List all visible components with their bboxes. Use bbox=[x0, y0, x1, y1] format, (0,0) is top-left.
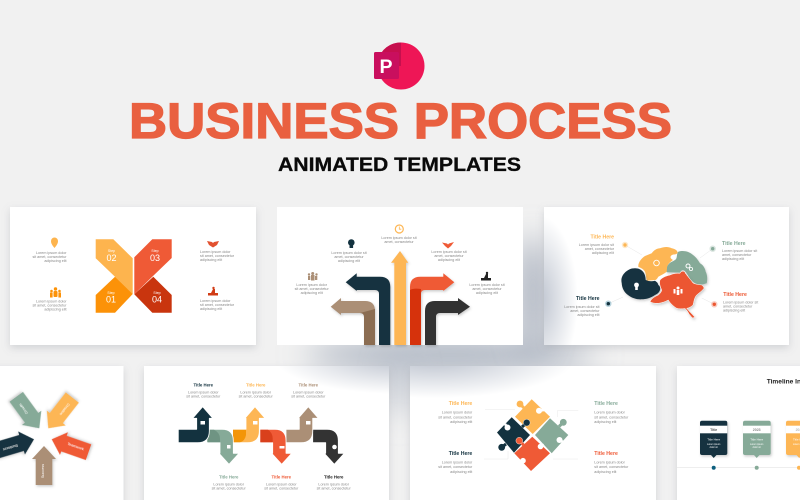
label: navy: Title Here bbox=[194, 382, 214, 388]
panel: radial arrows bbox=[0, 366, 124, 500]
card: navy: Title Here bbox=[707, 438, 720, 442]
ribbon: navy up bbox=[178, 407, 213, 443]
brain: navy lobe bbox=[621, 268, 660, 299]
card: green: Title Here bbox=[750, 438, 763, 442]
text block: brown: adipiscing elit bbox=[301, 291, 323, 295]
icon: people bbox=[50, 287, 61, 298]
label: navy bbox=[438, 451, 473, 474]
X diagram: Step bbox=[153, 291, 161, 295]
label: red bbox=[711, 292, 758, 312]
arrow: brown Success: Success bbox=[41, 464, 45, 478]
label: green: sit amet, consectetur bbox=[212, 486, 246, 490]
panel: arrows bbox=[277, 207, 523, 345]
label: red: sit amet, consectetur bbox=[264, 486, 299, 490]
ribbon: black down bbox=[313, 429, 344, 464]
card: yellow bbox=[786, 421, 800, 470]
text block: top left: Lorem ipsum dolor bbox=[36, 251, 67, 255]
icon: people bbox=[308, 272, 318, 280]
ribbon: green down bbox=[207, 429, 239, 464]
label: yellow bbox=[438, 401, 473, 424]
X diagram bbox=[96, 239, 172, 313]
arrow: black bbox=[425, 298, 470, 345]
text block: red: Lorem ipsum dolor sit bbox=[431, 250, 467, 254]
brain: red lobe bbox=[650, 271, 704, 318]
label: navy: adipiscing elit bbox=[450, 470, 472, 474]
arrow: brown Success bbox=[32, 446, 56, 485]
X diagram: 02 bbox=[106, 253, 117, 263]
panel: timeline bbox=[677, 366, 800, 500]
label: green bbox=[594, 401, 629, 424]
title: BUSINESS PROCESS bbox=[129, 93, 672, 149]
text block: bottom left: sit amet, consectetur bbox=[32, 304, 67, 308]
label: red: sit amet, consectetur bbox=[594, 465, 629, 469]
label: navy: Lorem ipsum dolor bbox=[188, 390, 219, 394]
text block: bottom right bbox=[200, 299, 235, 311]
label: yellow: Lorem ipsum dolor sit bbox=[579, 243, 614, 247]
brain: green lobe bbox=[666, 251, 707, 285]
label: navy bbox=[186, 382, 221, 398]
text block: red: amet, consectetur bbox=[434, 254, 464, 258]
card: green bbox=[743, 421, 771, 470]
panel: X steps bbox=[10, 207, 256, 345]
label: yellow: adipiscing elit bbox=[592, 251, 614, 255]
label: green: Lorem ipsum dolor bbox=[594, 410, 626, 414]
icon: pin bbox=[51, 238, 58, 248]
card: green: dolor sit bbox=[753, 446, 761, 449]
arrow: red bbox=[410, 273, 454, 345]
label: red: amet, consectetur bbox=[723, 304, 753, 308]
arrow: navy bbox=[346, 273, 390, 345]
ribbon icons bbox=[200, 421, 337, 449]
text block: navy: amet, consectetur bbox=[334, 255, 364, 259]
label: green: Lorem ipsum dolor bbox=[213, 483, 245, 487]
icon: hand bbox=[208, 287, 218, 296]
text block: brown: sit amet, consectetur bbox=[295, 287, 329, 291]
text block: red bbox=[431, 250, 467, 262]
text block: center: Lorem ipsum dolor sit bbox=[381, 236, 417, 240]
arrow: brown bbox=[331, 298, 375, 345]
text block: bottom right: adipiscing elit bbox=[200, 307, 222, 311]
icon: handshake bbox=[442, 242, 454, 248]
icon: handshake bbox=[207, 241, 219, 248]
label: black bbox=[317, 474, 351, 490]
brain icons bbox=[634, 260, 693, 295]
text block: top right bbox=[200, 250, 235, 262]
arrow: yellow bbox=[391, 251, 408, 345]
text block: top left: sit amet, consectetur bbox=[32, 255, 67, 259]
label: brown: Title Here bbox=[299, 382, 319, 388]
logo: PowerPoint: P bbox=[379, 56, 393, 78]
puzzle pieces bbox=[497, 399, 568, 471]
label: yellow: sit amet, consectetur bbox=[239, 394, 273, 398]
panel: brain bbox=[544, 207, 789, 345]
text block: navy: Lorem ipsum dolor sit bbox=[331, 251, 367, 255]
arrow: navy Business bbox=[0, 428, 37, 462]
label: yellow: Title Here bbox=[590, 234, 614, 240]
text block: bottom left: adipiscing elit bbox=[44, 308, 66, 312]
icon: bulb bbox=[348, 239, 355, 248]
label: yellow: adipiscing elit bbox=[450, 420, 472, 424]
label: green: amet, consectetur bbox=[722, 253, 752, 257]
text block: center: amet, consectetur bbox=[384, 240, 414, 244]
label: yellow: Lorem ipsum dolor bbox=[442, 410, 473, 414]
label: navy: Lorem ipsum dolor sit bbox=[564, 305, 600, 309]
label: red: Title Here bbox=[723, 292, 747, 298]
X diagram: Step bbox=[107, 291, 115, 295]
X diagram: Step bbox=[108, 249, 115, 253]
label: yellow: Lorem ipsum dolor bbox=[240, 390, 272, 394]
label: green: Lorem ipsum dolor sit bbox=[722, 249, 757, 253]
label: black: Lorem ipsum dolor bbox=[318, 483, 350, 487]
label: yellow: amet, consectetur bbox=[585, 247, 615, 251]
label: green bbox=[710, 241, 757, 261]
label: red: Lorem ipsum dolor bbox=[266, 483, 297, 487]
X diagram: 03 bbox=[150, 253, 160, 263]
label: brown: Lorem ipsum dolor bbox=[293, 390, 324, 394]
logo: PowerPoint bbox=[374, 42, 424, 90]
text block: top left: adipiscing elit bbox=[44, 259, 66, 263]
text block: bottom right: Lorem ipsum dolor bbox=[200, 299, 231, 303]
X diagram: 04 bbox=[152, 294, 162, 304]
label: yellow: Title Here bbox=[246, 382, 266, 388]
ribbon: brown up bbox=[286, 407, 318, 443]
piece: red bbox=[514, 437, 550, 471]
arrow: yellow Creative: Creative bbox=[59, 402, 70, 416]
label: red: Lorem ipsum dolor bbox=[594, 460, 626, 464]
label: brown: sit amet, consectetur bbox=[291, 394, 326, 398]
panel: puzzle bbox=[410, 366, 656, 500]
ribbon: yellow up bbox=[233, 407, 265, 443]
label: navy: Lorem ipsum dolor bbox=[442, 460, 473, 464]
ribbon: red down bbox=[260, 429, 292, 464]
label: green: sit amet, consectetur bbox=[594, 415, 629, 419]
piece: navy bbox=[497, 417, 530, 453]
label: red: Title Here bbox=[594, 451, 618, 457]
label: green: Title Here bbox=[219, 474, 239, 480]
label: red: adipiscing elit bbox=[723, 308, 745, 312]
label: navy: Title Here bbox=[449, 451, 472, 457]
label: brown bbox=[291, 382, 326, 398]
text block: top right: Lorem ipsum dolor bbox=[200, 250, 231, 254]
label: red: Title Here bbox=[272, 474, 292, 480]
piece: green bbox=[535, 418, 568, 453]
card: navy: Lorem ipsum bbox=[707, 443, 720, 446]
text block: brown bbox=[295, 283, 329, 295]
card: navy: Title bbox=[710, 428, 717, 432]
arrow: red Teamwork bbox=[48, 428, 92, 464]
text block: navy: adipiscing elit bbox=[338, 259, 360, 263]
icon: clock bbox=[395, 225, 403, 233]
arrow: green Growth: Growth bbox=[18, 403, 29, 415]
arrow: navy Business: Business bbox=[2, 443, 18, 451]
label: navy: Title Here bbox=[576, 296, 600, 302]
text block: top right: adipiscing elit bbox=[200, 258, 222, 262]
subtitle: ANIMATED TEMPLATES bbox=[278, 154, 521, 176]
label: navy: amet, consectetur bbox=[570, 309, 600, 313]
label: green: adipiscing elit bbox=[594, 420, 616, 424]
card: navy bbox=[700, 421, 727, 470]
label: navy: sit amet, consectetur bbox=[186, 394, 221, 398]
label: yellow: sit amet, consectetur bbox=[438, 415, 473, 419]
brain: yellow lobe bbox=[638, 247, 678, 281]
label: yellow bbox=[239, 382, 273, 398]
icon: hand bbox=[481, 272, 491, 280]
label: yellow: Title Here bbox=[449, 401, 472, 407]
text block: top right: sit amet, consectetur bbox=[200, 254, 235, 258]
label: red: adipiscing elit bbox=[594, 470, 616, 474]
text block: bottom left bbox=[32, 300, 67, 312]
label: navy: adipiscing elit bbox=[577, 313, 600, 317]
text block: bottom right: sit amet, consectetur bbox=[200, 303, 235, 307]
label: green: adipiscing elit bbox=[722, 257, 744, 261]
label: black: Title Here bbox=[324, 474, 344, 480]
text block: navy bbox=[331, 251, 367, 263]
label: red bbox=[594, 451, 629, 474]
label: green: Title Here bbox=[722, 241, 746, 247]
panel: ribbon process bbox=[144, 366, 389, 500]
label: green bbox=[212, 474, 246, 490]
card: green: 2023 bbox=[753, 428, 761, 432]
label: yellow bbox=[579, 234, 628, 255]
text block: top left bbox=[32, 251, 67, 263]
card: green: Lorem ipsum bbox=[750, 443, 763, 446]
label: red bbox=[264, 474, 299, 490]
card: navy: dolor sit bbox=[710, 446, 718, 449]
label: green: Title Here bbox=[594, 401, 618, 407]
X diagram: 01 bbox=[106, 294, 116, 304]
text block: brown: Lorem ipsum dolor bbox=[296, 283, 328, 287]
arrow: green Growth bbox=[7, 390, 49, 435]
text block: black: amet, consectetur bbox=[472, 287, 502, 291]
label: black: sit amet, consectetur bbox=[317, 486, 351, 490]
label: navy: sit amet, consectetur bbox=[438, 465, 473, 469]
text block: bottom left: Lorem ipsum dolor bbox=[36, 300, 67, 304]
arrow: yellow Creative bbox=[39, 390, 82, 436]
text block: black: Lorem ipsum dolor sit bbox=[469, 283, 505, 287]
label: red: Lorem ipsum dolor sit bbox=[723, 300, 758, 304]
text block: red: adipiscing elit bbox=[438, 258, 460, 262]
label: navy bbox=[564, 296, 612, 317]
X diagram: Step bbox=[151, 249, 159, 253]
text block: black bbox=[469, 283, 505, 295]
text block: center bbox=[381, 236, 417, 244]
arrow: red Teamwork: Teamwork bbox=[67, 442, 85, 451]
piece: yellow bbox=[515, 399, 550, 434]
text block: black: adipiscing elit bbox=[476, 291, 498, 295]
